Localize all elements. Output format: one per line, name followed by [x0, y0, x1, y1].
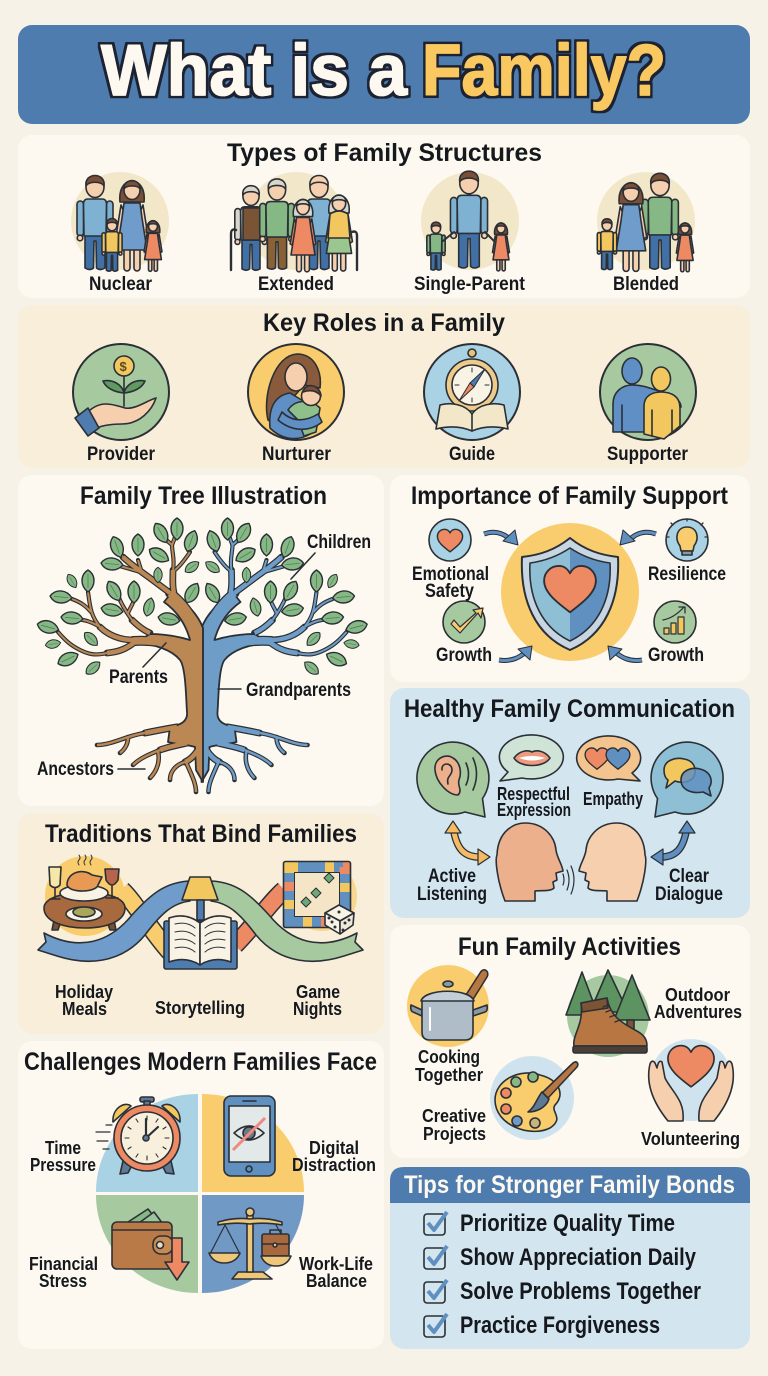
storytelling icon — [164, 877, 237, 969]
game nights icon — [284, 861, 357, 934]
clock icon — [96, 1097, 180, 1174]
label: respectful expression: Expression — [497, 800, 571, 820]
creative projects icon — [422, 1056, 578, 1144]
empathy bubble: Empathy — [583, 789, 643, 809]
scales icon — [209, 1208, 291, 1279]
panel: traditions — [18, 813, 384, 1034]
emotional safety icon: Safety — [425, 581, 474, 602]
cooking icon: Cooking — [418, 1047, 480, 1067]
tradition labels: Holiday — [55, 982, 113, 1002]
growth check icon: Growth — [436, 645, 492, 666]
tip 1: Prioritize Quality Time — [460, 1210, 675, 1237]
lips bubble — [499, 735, 563, 781]
title — [101, 31, 666, 111]
label: children: Children — [307, 532, 371, 553]
tip 4: Practice Forgiveness — [460, 1312, 660, 1339]
label: financial stress: Stress — [39, 1271, 87, 1291]
label: active listening — [417, 866, 487, 905]
emotional safety icon: Emotional — [412, 564, 489, 585]
ear bubble — [417, 742, 489, 817]
label: children — [291, 532, 371, 579]
label: parents: Parents — [109, 667, 168, 688]
growth chart icon — [648, 601, 704, 666]
outdoor adventures icon: Adventures — [654, 1002, 742, 1022]
label: active listening: Active — [428, 866, 476, 887]
label: digital distraction: Digital — [309, 1138, 359, 1158]
nurturer icon — [248, 344, 344, 465]
tradition labels: Meals — [62, 999, 107, 1019]
blended family — [597, 172, 695, 295]
cooking icon — [407, 965, 489, 1085]
label: respectful expression: Respectful — [497, 784, 570, 804]
creative projects icon: Creative — [422, 1106, 486, 1126]
tips header: Tips for Stronger Family Bonds — [404, 1171, 735, 1199]
ribbon — [38, 881, 363, 961]
nurturer icon: Nurturer — [262, 444, 332, 465]
outdoor adventures icon: Outdoor — [665, 985, 730, 1005]
provider icon: $ — [120, 359, 128, 374]
arrows to shield — [484, 530, 656, 660]
two heads in profile — [496, 823, 646, 901]
supporter icon: Supporter — [607, 444, 689, 465]
label: financial stress — [29, 1254, 98, 1291]
empathy bubble — [577, 736, 643, 809]
tradition labels: Nights — [293, 999, 342, 1019]
extended family — [231, 172, 357, 295]
label: ancestors: Ancestors — [37, 759, 114, 780]
blended family: Blended — [613, 274, 679, 295]
supporter icon — [600, 344, 696, 465]
title banner — [18, 25, 750, 124]
panel: importance of family support — [390, 475, 750, 682]
arrow: clear dialogue — [651, 821, 695, 865]
panel: healthy family communication — [390, 688, 750, 918]
heading: Healthy Family Communication — [404, 695, 735, 723]
label: digital distraction — [292, 1138, 376, 1175]
heading: Traditions That Bind Families — [45, 820, 357, 848]
heading: Fun Family Activities — [458, 933, 681, 961]
label: active listening: Listening — [417, 884, 487, 905]
label: clear dialogue: Clear — [669, 866, 710, 887]
label: work-life balance — [299, 1254, 373, 1291]
resilience icon: Resilience — [648, 564, 726, 585]
label: grandparents — [218, 680, 351, 701]
heading: Importance of Family Support — [411, 482, 729, 510]
provider icon: Provider — [87, 444, 156, 465]
holiday meals icon — [44, 855, 125, 936]
shield with heart — [501, 523, 639, 661]
tradition labels: Storytelling — [155, 998, 245, 1018]
tip 2: Show Appreciation Daily — [460, 1244, 697, 1271]
guide icon: Guide — [449, 444, 495, 465]
label: work-life balance: Work-Life — [299, 1254, 373, 1274]
label: digital distraction: Distraction — [292, 1155, 376, 1175]
heading: Key Roles in a Family — [263, 309, 505, 337]
resilience icon — [648, 519, 726, 585]
creative projects icon: Projects — [423, 1124, 486, 1144]
tradition labels — [55, 982, 342, 1019]
title: Family? — [422, 31, 666, 111]
heading: Types of Family Structures — [227, 139, 542, 167]
heading: Family Tree Illustration — [80, 482, 327, 510]
single-parent family: Single-Parent — [414, 274, 526, 295]
volunteering icon: Volunteering — [641, 1129, 740, 1149]
single-parent family — [414, 171, 526, 295]
phone icon — [224, 1096, 275, 1176]
tip 3: Solve Problems Together — [460, 1278, 701, 1305]
panel: family tree — [18, 475, 384, 806]
label: respectful expression — [497, 784, 571, 820]
arrow: active listening — [445, 821, 490, 865]
quadrant circle — [96, 1094, 304, 1293]
panel: challenges — [18, 1041, 384, 1349]
wallet icon — [112, 1209, 189, 1280]
label: time pressure: Pressure — [30, 1155, 96, 1175]
outdoor adventures icon — [566, 970, 742, 1057]
guide icon — [424, 344, 520, 465]
emotional safety icon — [412, 519, 489, 602]
label: clear dialogue: Dialogue — [655, 884, 723, 905]
title: What is a — [101, 31, 408, 111]
growth chart icon: Growth — [648, 645, 704, 666]
volunteering icon — [641, 1039, 740, 1149]
provider icon — [73, 344, 169, 465]
cooking icon: Together — [415, 1065, 483, 1085]
panel: fun family activities — [390, 925, 750, 1158]
nuclear family — [71, 172, 169, 295]
panel: types of family structures — [18, 135, 750, 298]
heading: Challenges Modern Families Face — [24, 1048, 377, 1076]
label: work-life balance: Balance — [306, 1271, 367, 1291]
label: time pressure — [30, 1138, 96, 1175]
label: parents — [109, 643, 168, 688]
label: grandparents: Grandparents — [246, 680, 351, 701]
nuclear family: Nuclear — [89, 274, 153, 295]
label: clear dialogue — [655, 866, 723, 905]
tree illustration — [36, 518, 369, 792]
dialogue bubble — [651, 742, 723, 817]
label: time pressure: Time — [45, 1138, 81, 1158]
tradition labels: Game — [296, 982, 340, 1002]
panel: tips — [390, 1167, 750, 1349]
growth check icon — [436, 601, 492, 666]
label: financial stress: Financial — [29, 1254, 98, 1274]
panel: key roles — [18, 305, 750, 468]
extended family: Extended — [258, 274, 334, 295]
